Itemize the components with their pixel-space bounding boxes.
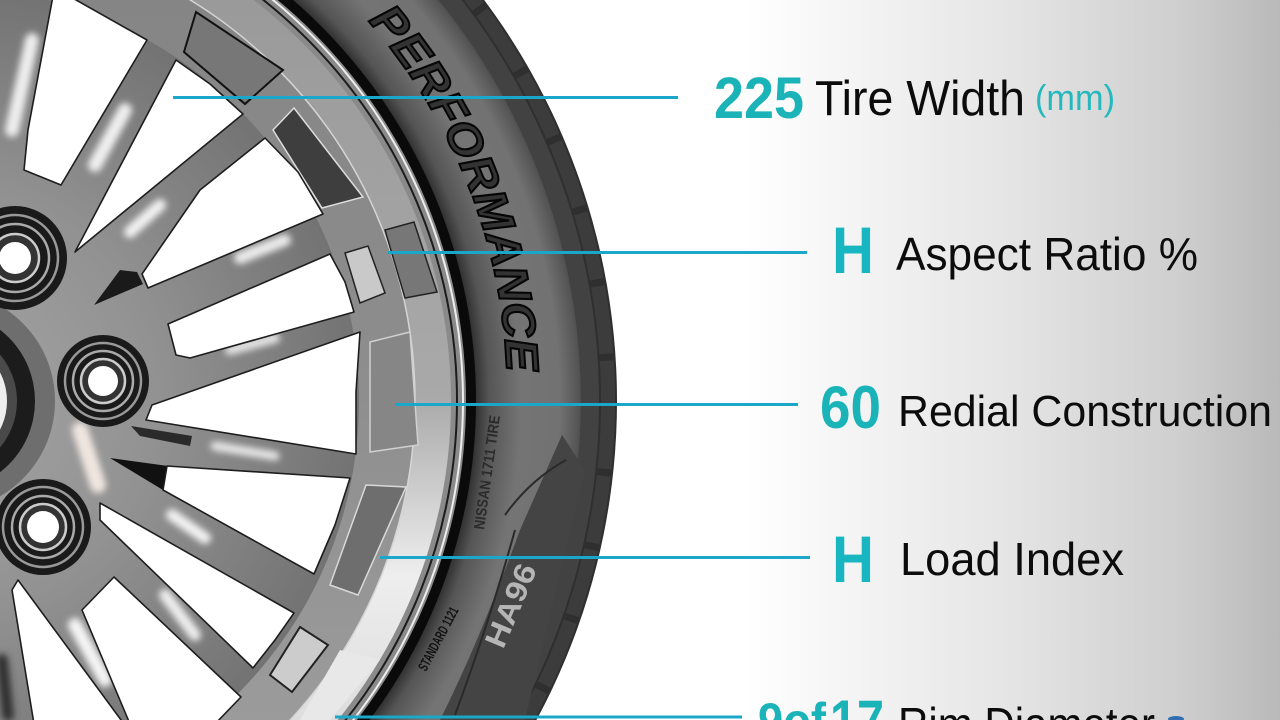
callout line: tire width [173, 96, 678, 99]
unit mm: (mm) [1035, 77, 1115, 118]
text load index: Load Index [900, 533, 1124, 585]
label: H load index [832, 522, 1124, 596]
sidewall small print: STANDARD 1121 [415, 604, 462, 673]
dark spoke wedges [94, 270, 143, 305]
wheel hub [0, 291, 55, 511]
label: 225 tire width [714, 66, 1115, 131]
label: 60 radial construction [820, 374, 1272, 441]
sidewall size text: NISSAN 1711 TIRE [471, 414, 504, 531]
sidewall number: HA96 [479, 559, 544, 653]
callout line: aspect ratio [388, 251, 807, 254]
callout line: rim diameter [335, 716, 742, 718]
code 225: 225 [714, 66, 804, 131]
lug nut middle [57, 335, 149, 427]
rim lip [0, 0, 476, 720]
spokes [0, 0, 359, 720]
label: H aspect ratio [832, 213, 1198, 287]
callout line: load index [380, 556, 810, 559]
tire sidewall [296, 0, 581, 720]
text tire width: Tire Width [815, 72, 1025, 126]
small unit mark [1168, 716, 1184, 720]
tire tread [0, 0, 617, 720]
wheel windows [12, 0, 360, 720]
code 60: 60 [820, 374, 881, 441]
text redial construction: Redial Construction [898, 387, 1272, 436]
lug nut top [0, 206, 67, 310]
spoke highlights [2, 40, 285, 715]
text aspect ratio: Aspect Ratio % [896, 228, 1198, 280]
sidewall brand lettering: PERFORMANCE [367, 5, 540, 372]
callout line: radial construction [395, 403, 798, 406]
rim barrel [0, 0, 437, 720]
tire and wheel photo [0, 0, 617, 720]
label: 17 rim diameter [758, 688, 1184, 720]
code H: H [832, 522, 874, 596]
lug nut bottom [0, 479, 91, 575]
code H: H [832, 213, 874, 287]
barrel pocket panels [184, 12, 283, 104]
